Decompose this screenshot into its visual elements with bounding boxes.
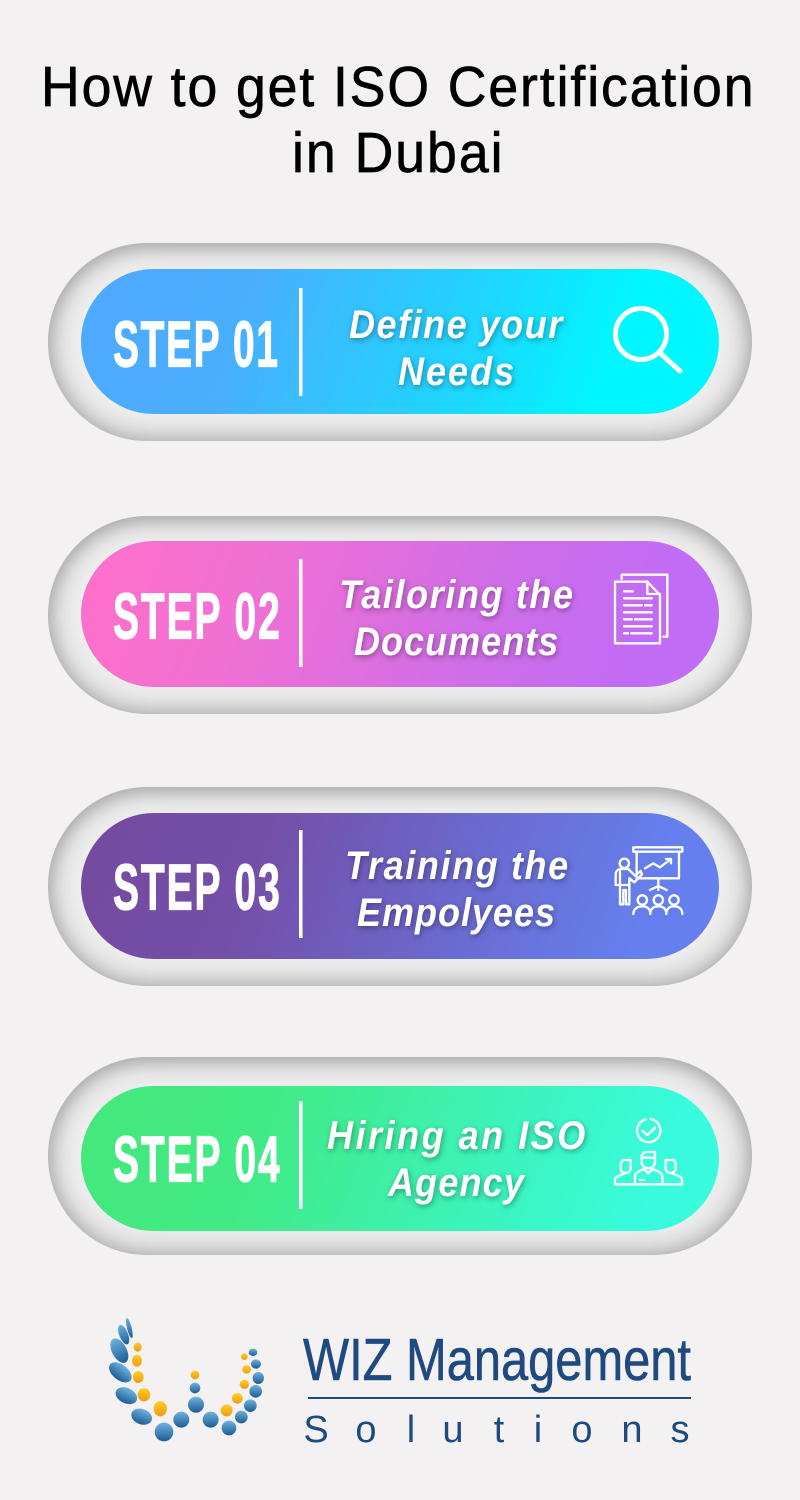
- logo wordmark: [303, 1327, 691, 1451]
- panel: step 02: [48, 516, 752, 714]
- divider: [299, 288, 302, 396]
- step number: STEP 04: [113, 1123, 280, 1196]
- step label: [327, 1114, 585, 1205]
- step label: [349, 303, 564, 394]
- step label: Empolyees: [357, 891, 555, 935]
- step label: [345, 844, 568, 935]
- icon: presenter and audience: [616, 847, 682, 914]
- step number: STEP 01: [113, 308, 278, 381]
- step label: Needs: [398, 350, 514, 394]
- panel: step 03: [48, 787, 752, 986]
- step label: Training the: [345, 844, 568, 888]
- logo: [109, 1318, 691, 1451]
- divider: [299, 1101, 302, 1209]
- step number: STEP 03: [113, 851, 280, 924]
- icon: magnifying glass: [616, 308, 680, 371]
- panel: step 04: [48, 1057, 752, 1255]
- step label: Tailoring the: [339, 573, 573, 617]
- logo mark: [105, 1317, 264, 1441]
- step label: [339, 573, 573, 664]
- step label: Agency: [387, 1161, 526, 1205]
- step label: Define your: [349, 303, 564, 347]
- divider: [299, 830, 302, 938]
- title: [41, 54, 754, 184]
- step label: Documents: [354, 620, 558, 664]
- divider: [299, 559, 302, 667]
- panel: step 01: [48, 243, 752, 441]
- icon: team with check mark: [615, 1119, 682, 1184]
- logo wordmark: Solutions: [303, 1409, 690, 1451]
- title: in Dubai: [292, 120, 503, 184]
- icon: documents: [615, 575, 667, 643]
- title: How to get ISO Certification: [41, 54, 754, 118]
- step label: Hiring an ISO: [327, 1114, 585, 1158]
- step number: STEP 02: [113, 580, 280, 653]
